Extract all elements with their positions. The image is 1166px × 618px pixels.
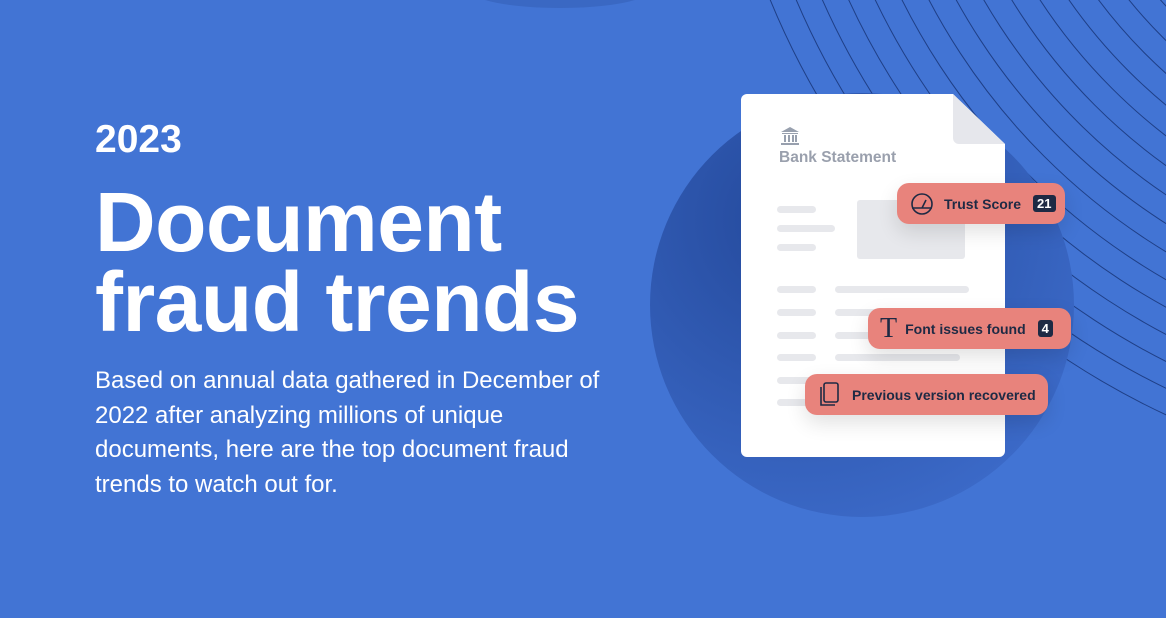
- callout: font issues: [868, 308, 1071, 349]
- heading block: [95, 118, 600, 498]
- title: fraud trends: [95, 255, 579, 349]
- callout: font issues: 4: [1042, 321, 1049, 336]
- doc title: Bank Statement: [779, 149, 896, 166]
- callout: font issues: T: [880, 312, 897, 344]
- callout: trust score: 21: [1037, 196, 1052, 211]
- document illustration: [741, 94, 1005, 457]
- title: [95, 175, 579, 349]
- title: Document: [95, 175, 502, 269]
- callout: previous version: [805, 374, 1048, 415]
- icon: bank: [781, 127, 799, 145]
- callout: trust score: Trust Score: [944, 196, 1021, 212]
- description: Based on annual data gathered in December of 2022 after analyzing millions of unique documents, here are the top document fraud trends to watch out for.: [95, 367, 599, 498]
- callout: trust score: [897, 183, 1065, 224]
- callout: previous version: Previous version recovered: [852, 386, 1036, 402]
- year: 2023: [95, 118, 182, 161]
- callout: font issues: Font issues found: [905, 320, 1026, 336]
